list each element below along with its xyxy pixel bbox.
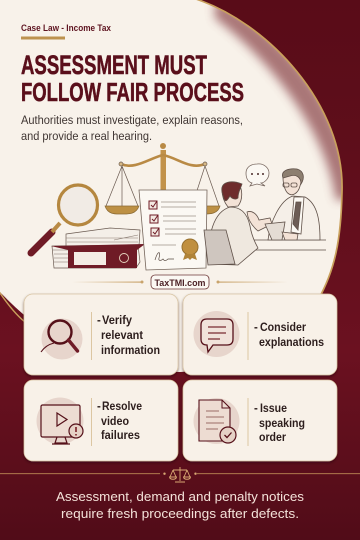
- applicant: [204, 182, 258, 265]
- footer text: [56, 489, 305, 521]
- panel: cream arc: [0, 0, 350, 372]
- text: -: [254, 403, 258, 415]
- illustration: scales: [105, 143, 220, 214]
- illustration: hearing scene: [204, 169, 326, 265]
- illustration: stacked files: [51, 228, 145, 268]
- footer divider with scales icon: [0, 467, 360, 482]
- text: Issue: [260, 403, 287, 415]
- text: failures: [101, 430, 140, 442]
- text: Consider: [260, 322, 306, 334]
- desk: [240, 240, 326, 262]
- text: -: [97, 315, 101, 327]
- illustration: speech bubble: [246, 164, 269, 186]
- panel: issue speaking order: [183, 380, 337, 461]
- text: information: [101, 345, 160, 357]
- title: [21, 50, 244, 107]
- panel: resolve video failures: [24, 380, 178, 461]
- text: Resolve: [102, 401, 142, 413]
- footer text: require fresh proceedings after defects.: [61, 506, 299, 521]
- text: speaking: [259, 418, 305, 430]
- icon: document with check: [194, 398, 240, 444]
- accent bar: [21, 36, 65, 40]
- illustration: magnifying glass: [31, 185, 98, 253]
- official: [247, 169, 320, 240]
- subtitle: and provide a real hearing.: [21, 129, 152, 143]
- title: FOLLOW FAIR PROCESS: [21, 77, 244, 107]
- panel: verify relevant information: [24, 294, 178, 375]
- subtitle: Authorities must investigate, explain reasons,: [21, 113, 243, 127]
- icon: speech bubble: [194, 311, 240, 357]
- text: order: [259, 432, 286, 444]
- icon: magnifying glass: [41, 318, 82, 360]
- text: explanations: [259, 337, 324, 349]
- title: ASSESSMENT MUST: [21, 50, 207, 80]
- illustration: checklist document: [139, 190, 207, 270]
- footer text: Assessment, demand and penalty notices: [56, 489, 305, 504]
- brand label: TaxTMI.com: [154, 278, 206, 289]
- eyebrow: Case Law - Income Tax: [21, 23, 111, 33]
- subtitle: [21, 113, 243, 143]
- icon: monitor with alert: [36, 398, 84, 444]
- text: relevant: [101, 330, 143, 342]
- panel: consider explanations: [183, 294, 337, 375]
- text: video: [101, 416, 129, 428]
- text: -: [97, 401, 101, 413]
- text: Verify: [102, 315, 133, 327]
- brand label: [72, 275, 288, 289]
- text: -: [254, 322, 258, 334]
